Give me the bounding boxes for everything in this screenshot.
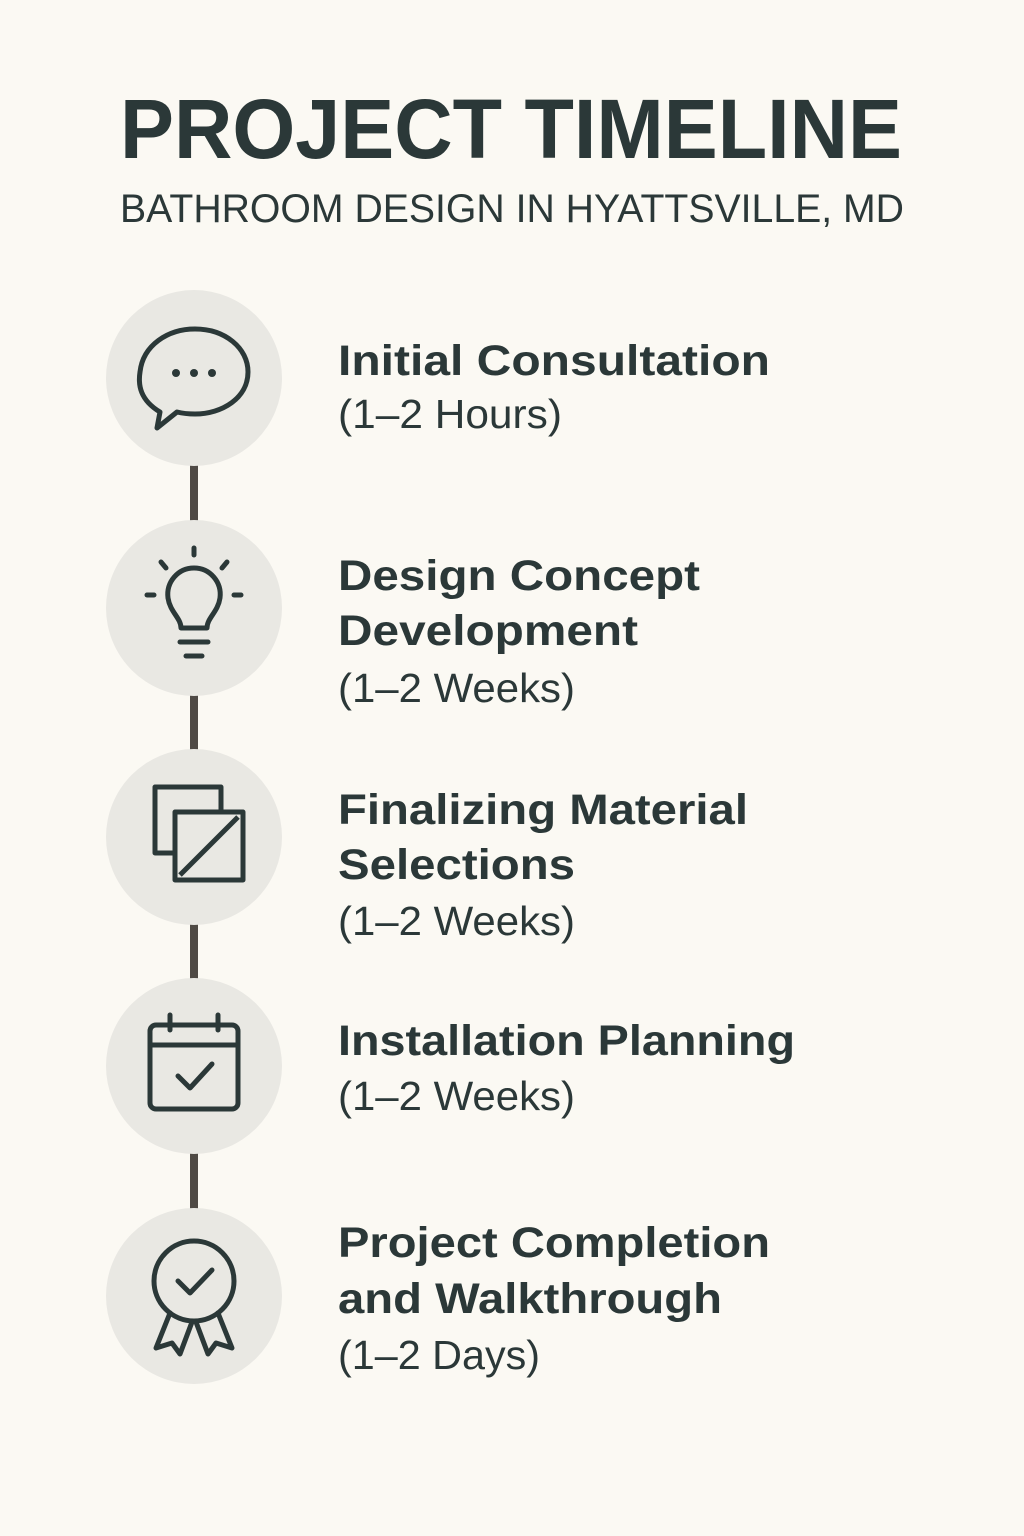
icon: light bulb xyxy=(147,548,241,656)
step 2: design concept: Development xyxy=(338,607,638,655)
step 3: materials: Finalizing Material xyxy=(338,786,748,834)
step 3: materials: Selections xyxy=(338,841,575,889)
icon: award badge xyxy=(154,1241,234,1354)
timeline connectors xyxy=(190,464,198,1210)
step 5: project completion: (1–2 Days) xyxy=(338,1332,540,1378)
icon: material swatches xyxy=(155,787,243,880)
title: PROJECT TIMELINE xyxy=(120,82,902,176)
step 4: installation planning: (1–2 Weeks) xyxy=(338,1073,575,1119)
step 1: initial consultation: (1–2 Hours) xyxy=(338,391,562,437)
step 4: installation planning xyxy=(106,978,795,1154)
step 5: project completion: and Walkthrough xyxy=(338,1275,722,1323)
step 1: initial consultation: Initial Consultation xyxy=(338,337,770,385)
step 4: installation planning: Installation Planning xyxy=(338,1017,795,1065)
step 5: project completion xyxy=(106,1208,770,1384)
step 3: materials xyxy=(106,749,748,944)
subtitle: BATHROOM DESIGN IN HYATTSVILLE, MD xyxy=(120,187,904,231)
step 2: design concept: (1–2 Weeks) xyxy=(338,665,575,711)
step 5: project completion: Project Completion xyxy=(338,1219,770,1267)
step 2: design concept: Design Concept xyxy=(338,552,700,600)
icon: speech bubble xyxy=(139,329,248,428)
step 2: design concept xyxy=(106,520,700,711)
step 3: materials: (1–2 Weeks) xyxy=(338,898,575,944)
step 1: initial consultation xyxy=(106,290,770,466)
icon: calendar xyxy=(150,1015,238,1109)
